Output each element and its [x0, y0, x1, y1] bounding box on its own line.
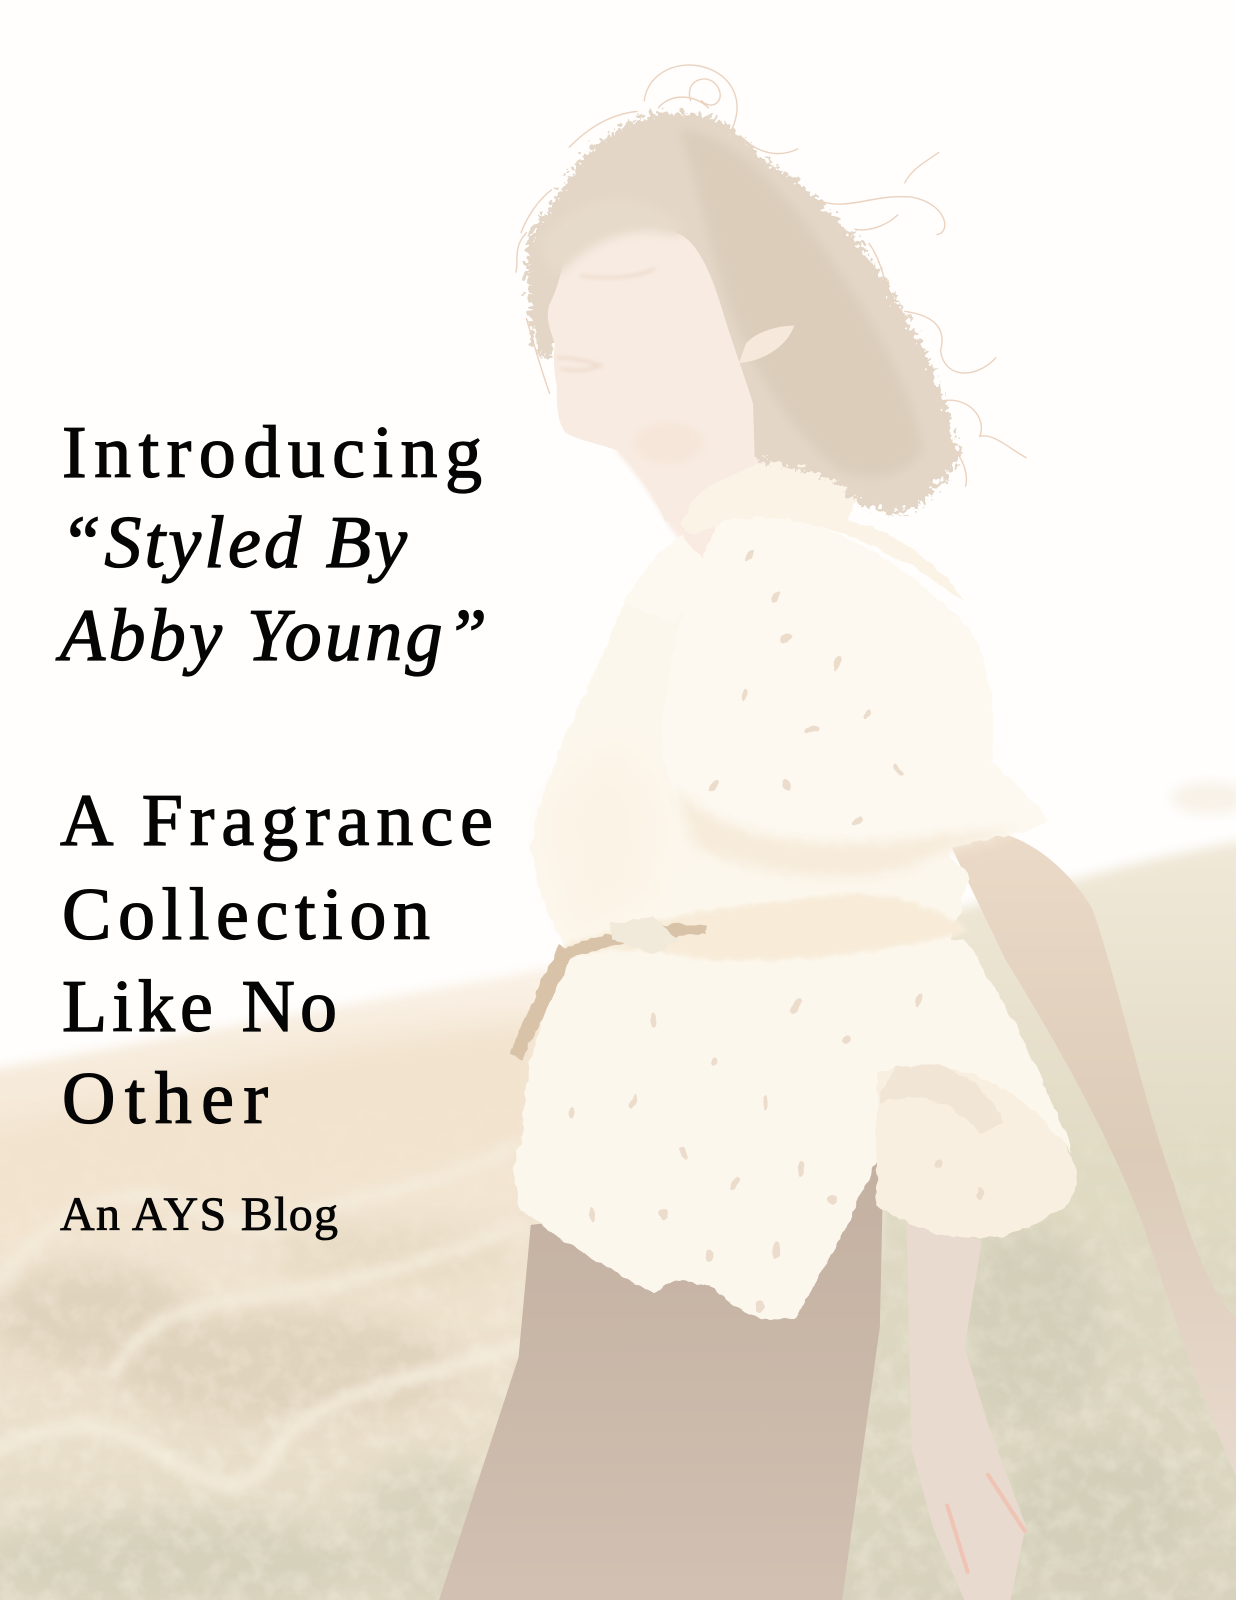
- warm shaded slope: [0, 1021, 541, 1276]
- upper sleeve: [662, 516, 1048, 879]
- translucent peplum: [876, 1050, 1078, 1238]
- right hillside: [817, 832, 1236, 1600]
- dark foliage shadows: [0, 1225, 510, 1600]
- title: Styled By: “Styled By: [60, 502, 407, 584]
- title: Abby Young: Abby Young”: [55, 595, 487, 677]
- forearm: [906, 1220, 1026, 1600]
- eye and lips: [557, 268, 655, 370]
- left hillside: [0, 965, 572, 1600]
- distant tree: [1171, 782, 1236, 815]
- belt: [508, 924, 706, 1059]
- byline: An AYS Blog: [60, 1188, 338, 1241]
- shoulder shading: [541, 747, 663, 939]
- neck shadow blush: [634, 422, 705, 465]
- ear: [739, 326, 794, 363]
- fingers: [947, 1475, 1025, 1572]
- neck: [615, 388, 847, 572]
- head: [516, 65, 1026, 522]
- hair mass: [522, 107, 953, 507]
- lower right blouse: [714, 939, 1072, 1153]
- eyelet holes: [569, 549, 983, 1312]
- trousers: [439, 1143, 884, 1600]
- inner sleeve fold: [878, 1061, 1005, 1133]
- foliage texture: [2, 1240, 1236, 1600]
- flyaway curls: [516, 65, 1026, 486]
- face: [548, 213, 755, 522]
- far arm and hand: [906, 1220, 1026, 1600]
- background landscape: [0, 782, 1236, 1600]
- near arm: [944, 829, 1236, 1485]
- waist band: [566, 894, 970, 961]
- darker hair core: [680, 129, 923, 477]
- headline: [55, 412, 493, 1140]
- collar ruffle: [682, 455, 965, 602]
- subtitle: Collection: Collection: [62, 874, 430, 956]
- title: Introducing: Introducing: [62, 412, 482, 494]
- torso and lower blouse: [514, 572, 970, 1320]
- belt buckle: [608, 917, 679, 954]
- sleeve hem shade: [674, 786, 1021, 878]
- foliage ridges: [0, 1143, 521, 1485]
- neck ruffle left: [623, 536, 714, 623]
- subtitle: A Fragrance: A Fragrance: [60, 780, 493, 862]
- figure: [439, 388, 1236, 1600]
- blouse: [508, 455, 1078, 1320]
- right foliage shadows: [959, 1225, 1194, 1582]
- hair fringe over brow: [541, 199, 683, 275]
- subtitle: Other: Other: [62, 1058, 268, 1140]
- subtitle: Like No: Like No: [62, 966, 337, 1048]
